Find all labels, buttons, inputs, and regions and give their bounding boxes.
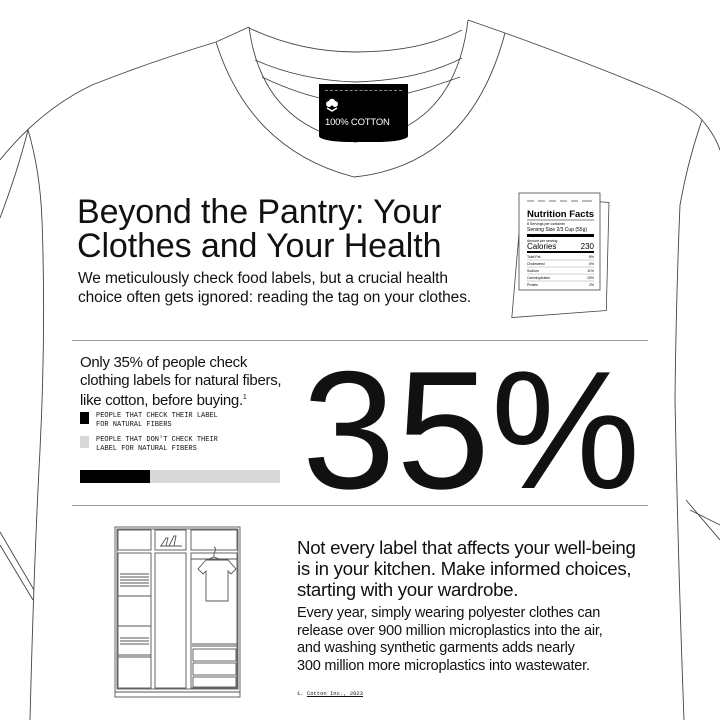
right shoulder & sleeve — [468, 20, 720, 150]
message body: release over 900 million microplastics into the air, — [297, 622, 603, 638]
stat text: Only 35% of people check — [80, 354, 247, 371]
message heading: is in your kitchen. Make informed choices, — [297, 558, 631, 579]
title — [77, 193, 441, 265]
legend: check — [80, 412, 89, 424]
message heading: Not every label that affects your well-being — [297, 537, 636, 558]
icon: cotton boll — [326, 98, 338, 112]
icon: nutrition facts label — [511, 192, 610, 318]
title: Beyond the Pantry: Your — [77, 193, 441, 231]
message heading — [297, 537, 636, 600]
message body: Every year, simply wearing polyester clothes can — [297, 605, 600, 621]
icon: nutrition facts label: 8 Servings per container — [527, 222, 566, 226]
icon: nutrition facts label: Nutrition Facts — [527, 209, 594, 220]
collar — [216, 33, 505, 177]
icon: nutrition facts label: 8% — [589, 255, 594, 259]
icon: nutrition facts label: Cholesterol — [527, 262, 545, 266]
icon: nutrition facts label: Total Fat — [527, 255, 540, 259]
label text: 100% COTTON — [325, 117, 390, 128]
stat text: clothing labels for natural fibers, — [80, 372, 281, 388]
icon: nutrition facts label: Serving Size 2/3 Cup (55g) — [527, 227, 587, 233]
bar chart — [80, 470, 280, 483]
legend: don't check — [80, 436, 89, 448]
icon: wardrobe — [114, 526, 240, 698]
left shoulder & sleeve — [0, 27, 249, 160]
icon: nutrition facts label: Amount per serving — [527, 239, 557, 243]
icon: nutrition facts label: 15% — [587, 276, 594, 280]
neck label: 100% cotton — [319, 84, 408, 142]
title: Clothes and Your Health — [77, 227, 441, 265]
icon: nutrition facts label: Sodium — [527, 269, 539, 273]
message body — [297, 605, 603, 674]
legend: PEOPLE THAT DON'T CHECK THEIR — [96, 436, 218, 444]
subtitle: We meticulously check food labels, but a crucial health — [78, 270, 448, 287]
message heading: starting with your wardrobe. — [297, 579, 518, 600]
icon: nutrition facts label: Carbohydrates — [527, 276, 550, 280]
stat text: like cotton, before buying.1 — [80, 392, 246, 409]
legend — [80, 412, 218, 453]
big number 35%: 35% — [302, 336, 641, 524]
footnote: 1. Cotton Inc., 2023 — [297, 690, 363, 697]
icon: nutrition facts label: Protein — [527, 283, 538, 287]
text: LABEL FOR NATURAL FIBERS — [96, 445, 197, 453]
legend: FOR NATURAL FIBERS — [96, 421, 172, 429]
icon: nutrition facts label: Calories — [527, 242, 556, 251]
icon: nutrition facts label: 2% — [589, 283, 594, 287]
message body: 300 million more microplastics into wastewater. — [297, 658, 590, 674]
stat text — [80, 354, 281, 409]
legend: PEOPLE THAT CHECK THEIR LABEL — [96, 412, 218, 420]
subtitle: choice often gets ignored: reading the tag on your clothes. — [78, 289, 471, 306]
icon: nutrition facts label: 11% — [587, 269, 594, 273]
message body: and washing synthetic garments adds nearly — [297, 640, 575, 656]
icon: nutrition facts label: 0% — [589, 262, 594, 266]
dashes — [325, 90, 402, 91]
subtitle — [78, 270, 471, 306]
icon: nutrition facts label: 230 — [581, 242, 595, 251]
